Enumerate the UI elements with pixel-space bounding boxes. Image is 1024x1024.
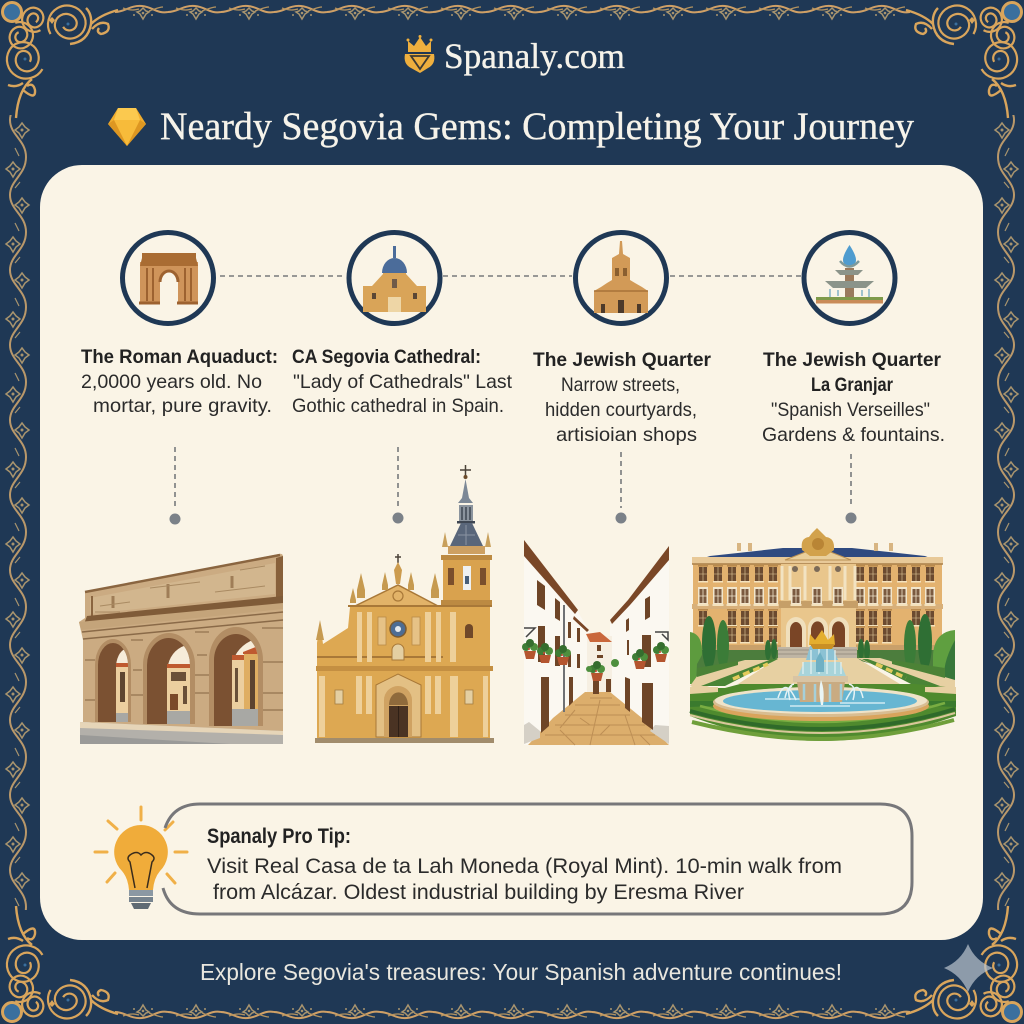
hanging planters — [522, 628, 669, 681]
text block: Jewish Quarter: hidden courtyards, — [545, 399, 697, 421]
timeline connectors — [170, 276, 856, 524]
text block: La Granjar: Gardens & fountains. — [762, 424, 945, 446]
text block: Jewish Quarter: The Jewish Quarter — [533, 349, 711, 371]
garden and plaza — [690, 614, 956, 741]
text block: La Granjar — [762, 349, 945, 446]
text block: Roman Aquaduct: 2,0000 years old. No — [81, 371, 262, 393]
title — [108, 105, 914, 148]
text block: La Granjar: La Granjar — [811, 374, 893, 396]
pro tip callout — [95, 804, 912, 914]
portal — [376, 674, 421, 737]
arch 1 — [95, 639, 131, 724]
text block: La Granjar: The Jewish Quarter — [763, 349, 941, 371]
icon: lightbulb — [95, 807, 187, 909]
spire — [442, 465, 491, 554]
steps — [315, 738, 494, 743]
icon: sparkle — [944, 944, 993, 992]
text block: Roman Aquaduct: mortar, pure gravity. — [93, 395, 272, 417]
icon: gem — [108, 108, 146, 146]
illustration: Segovia cathedral — [315, 465, 494, 743]
text block: La Granjar: "Spanish Verseilles" — [771, 399, 930, 421]
lower hedges — [690, 684, 956, 741]
upper windows — [698, 565, 936, 644]
text block: Jewish Quarter — [533, 349, 711, 446]
callout outline — [163, 804, 912, 914]
icon: arch badge — [122, 232, 214, 324]
text block: Segovia Cathedral — [292, 346, 513, 417]
icon: cathedral dome badge — [349, 232, 440, 324]
centre bay — [779, 564, 858, 648]
panel: main cream card — [40, 165, 983, 940]
text block: Jewish Quarter: artisioian shops — [556, 424, 697, 446]
title text: Neardy Segovia Gems: Completing Your Journey — [160, 105, 914, 148]
illustration: Jewish quarter street — [522, 540, 669, 745]
text block: Roman Aquaduct: The Roman Aquaduct: — [81, 346, 278, 368]
brand header — [405, 35, 625, 76]
tip text — [207, 825, 842, 904]
icon: crown shield — [405, 35, 434, 73]
windows and doors — [537, 580, 653, 733]
tip text: Visit Real Casa de ta Lah Moneda (Royal Mint). 10-min walk from — [207, 855, 842, 878]
icon: church tower badge — [576, 232, 666, 324]
arch 2 — [143, 633, 195, 726]
fountain — [778, 630, 863, 705]
arch 3 — [209, 627, 263, 728]
text block: Roman Aquaduct — [81, 346, 278, 417]
main facade — [317, 607, 490, 742]
road — [80, 722, 283, 744]
text block: Segovia Cathedral: Gothic cathedral in Spain. — [292, 395, 504, 417]
icon: fountain badge — [804, 232, 895, 324]
text block: Jewish Quarter: Narrow streets, — [561, 374, 680, 396]
footer line: Explore Segovia's treasures: Your Spanish adventure continues! — [200, 959, 842, 985]
tip text: from Alcázar. Oldest industrial building by Eresma River — [213, 881, 744, 904]
text block: Segovia Cathedral: CA Segovia Cathedral: — [292, 346, 481, 368]
illustration: Roman aqueduct — [79, 554, 283, 744]
tip text: Spanaly Pro Tip: — [207, 825, 351, 848]
facade — [693, 562, 942, 648]
text block: Segovia Cathedral: "Lady of Cathedrals" Last — [293, 371, 513, 393]
illustration: La Granja palace and fountain — [690, 528, 956, 741]
steps — [778, 647, 857, 658]
brand name: Spanaly.com — [444, 36, 625, 76]
